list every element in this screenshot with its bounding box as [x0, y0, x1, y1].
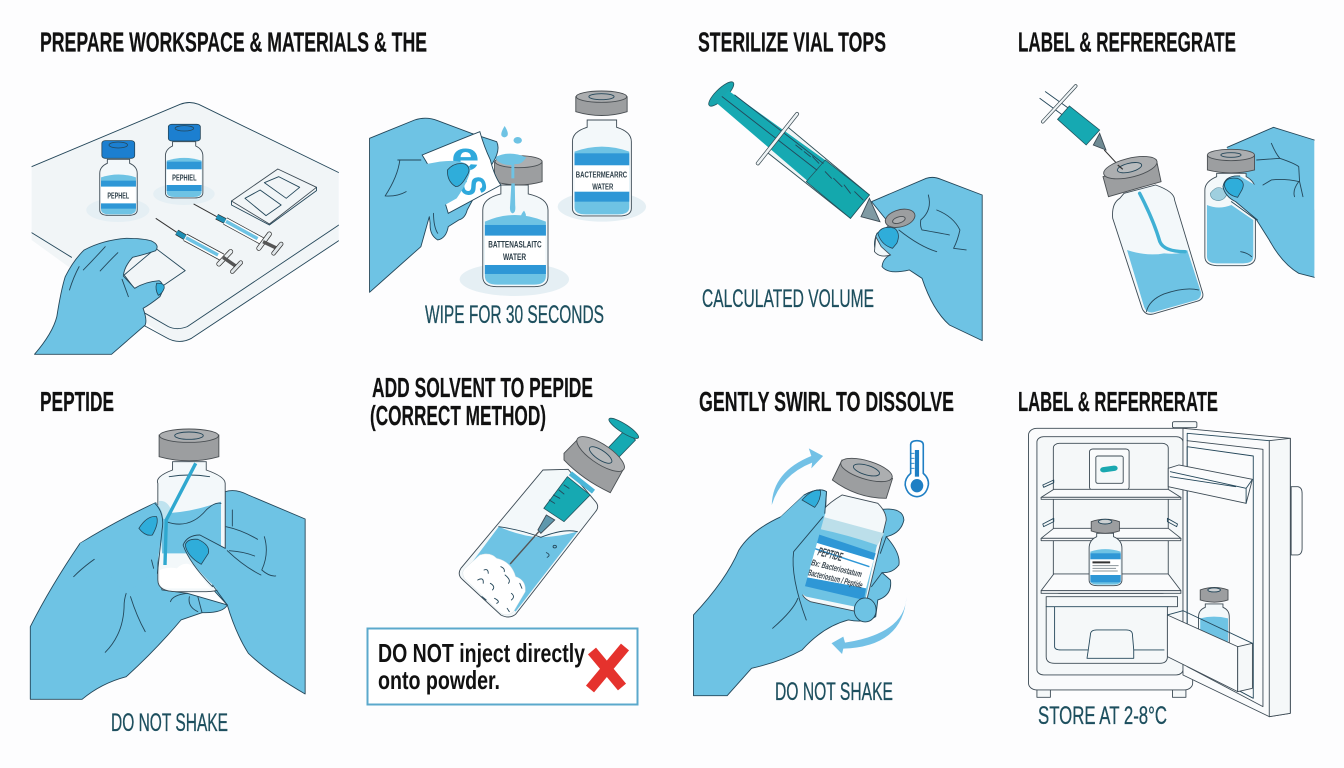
- workspace table: [21, 102, 349, 341]
- vial: peptide front: PEPHEL: [107, 191, 129, 200]
- fridge door: [1183, 428, 1302, 717]
- fridge body: [1029, 422, 1197, 697]
- panel: syringe drawing calculated volume: [705, 79, 982, 341]
- arrow: swirl down: [832, 597, 906, 654]
- panel: workspace illustration: [21, 102, 349, 354]
- caption: store at 2-8 C: STORE AT 2-8°C: [1038, 702, 1167, 730]
- vial: bacteriostatic water back: [558, 91, 646, 222]
- peptide vial with label: Bacteriostum / Peptide: [806, 568, 864, 591]
- panel: wipe vial illustration: [370, 91, 646, 296]
- upright vial in hand: [1205, 127, 1314, 277]
- gloved hands: [30, 491, 305, 699]
- fingers in front of vial: [80, 503, 276, 653]
- heading: peptide: PEPTIDE: [40, 386, 114, 417]
- heading: prepare workspace: PREPARE WORKSPACE & MATERIALS & THE: [40, 26, 427, 58]
- syringe: back: [194, 204, 281, 253]
- small syringe: [1040, 86, 1123, 170]
- caption: calculated volume: CALCULATED VOLUME: [702, 285, 874, 313]
- peptide vial with label: Bx: Bacteriostatum: [810, 558, 864, 580]
- gloved hand with swab: e: [451, 134, 479, 179]
- peptide vial with powder: [157, 429, 225, 592]
- vial: bacteriostatic water back: WATER: [592, 183, 613, 192]
- vial on shelf: [1089, 519, 1122, 586]
- panel: refrigerator illustration: [1029, 422, 1302, 717]
- caption: wipe for 30 seconds: WIPE FOR 30 SECONDS: [425, 301, 604, 329]
- temperature display: [1090, 449, 1129, 490]
- peptide vial with label: PEPTIDE: [816, 545, 845, 564]
- vial in door: [1199, 587, 1229, 643]
- thumb and fingers in front: [743, 490, 886, 628]
- syringe: [705, 79, 919, 231]
- heading: sterilize vial tops: STERILIZE VIAL TOPS: [698, 26, 886, 58]
- warning callout box: [368, 628, 638, 704]
- vial: bacteriostatic water front: [460, 126, 569, 296]
- fridge shelves: [1041, 480, 1181, 593]
- panel: hands holding peptide vial: [30, 429, 305, 699]
- crisper drawer: [1046, 597, 1178, 663]
- icon: thermometer: [905, 441, 928, 497]
- gloved hand behind vial: [693, 490, 904, 696]
- warning text line 1: DO NOT inject directly: [378, 638, 585, 668]
- vial: peptide front: [86, 141, 149, 222]
- panel: add solvent illustration: [459, 416, 642, 617]
- door shelf lower: [1167, 611, 1252, 692]
- panel: inject into vial illustration: [1040, 86, 1314, 314]
- vial: bacteriostatic water back: BACTERMEARRC: [576, 171, 627, 180]
- tilted vial with powder and syringe: [459, 416, 642, 617]
- caption: do not shake right: DO NOT SHAKE: [775, 678, 893, 706]
- door shelf upper: [1168, 465, 1252, 503]
- heading: correct method: (CORRECT METHOD): [370, 400, 546, 431]
- peptide vial with label: [800, 454, 896, 611]
- warning text line 2: onto powder.: [378, 665, 500, 695]
- gloved hand holding vial: [872, 177, 982, 341]
- syringe: front: [156, 218, 241, 272]
- vial: bacteriostatic water front: WATER: [503, 252, 526, 263]
- heading: gently swirl: GENTLY SWIRL TO DISSOLVE: [699, 386, 954, 417]
- card under hand: [124, 248, 185, 300]
- heading: label and refrigerate bottom: LABEL & REFERRERATE: [1018, 386, 1218, 417]
- vial: peptide back: PEPHIEL: [172, 174, 197, 182]
- vial: bacteriostatic water front: BATTENASLAITC: [488, 239, 542, 250]
- vial: peptide back: [153, 124, 215, 205]
- caption: do not shake left: DO NOT SHAKE: [111, 709, 228, 737]
- gloved hand with swab: [370, 118, 501, 292]
- gloved hand: [35, 238, 164, 354]
- heading: add solvent: ADD SOLVENT TO PEPIDE: [372, 372, 593, 403]
- icon: red cross: [590, 647, 625, 689]
- arrow: swirl up: [772, 448, 823, 505]
- alcohol swab packet: [231, 169, 317, 225]
- tilted vial with stream: [1100, 152, 1203, 314]
- panel: swirl illustration: [693, 441, 928, 696]
- gloved hand with swab: S: [451, 174, 496, 198]
